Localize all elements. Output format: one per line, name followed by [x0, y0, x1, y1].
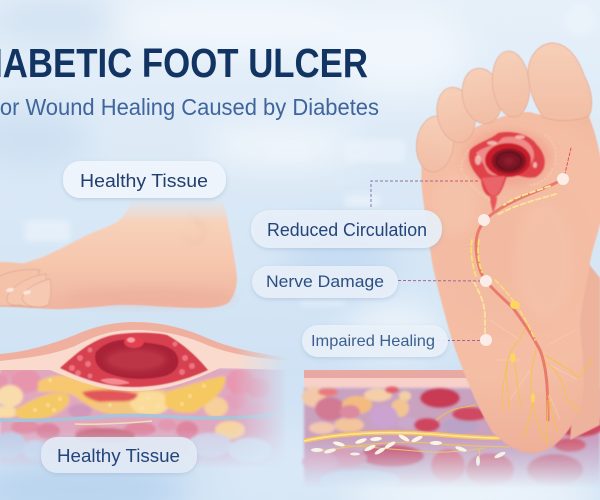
- pill: healthy tissue top: Healthy Tissue: [80, 171, 208, 191]
- pill: healthy tissue bottom: [41, 437, 197, 473]
- pill: reduced circulation: [251, 210, 442, 248]
- illustration: healthy foot side view: [0, 196, 237, 309]
- subcutaneous tissue: [0, 367, 285, 468]
- illustration: wound cross section: [0, 322, 290, 468]
- lower leg behind: [570, 258, 600, 440]
- skin layers: [0, 322, 290, 391]
- shading: [515, 200, 575, 320]
- toes: [0, 262, 51, 307]
- yellow nerve bundle: [304, 405, 510, 466]
- callout connector: nerve damage: [398, 280, 484, 282]
- pill: impaired healing: Impaired Healing: [311, 333, 435, 350]
- callout nodes: [478, 173, 569, 346]
- nerve pathway: [471, 148, 571, 420]
- callout connector: impaired healing: [437, 340, 484, 342]
- pill: nerve damage: [252, 266, 398, 298]
- pill: impaired healing: [302, 325, 448, 357]
- pill: reduced circulation: Reduced Circulation: [267, 220, 427, 240]
- pill: healthy tissue top: [63, 161, 226, 198]
- toes: [414, 49, 533, 174]
- fat speckle: [33, 378, 206, 412]
- illustration: nerve tissue cross section: [300, 370, 600, 486]
- callout connector: reduced circulation: [371, 181, 480, 207]
- sole: [421, 112, 600, 453]
- nerve branches: [502, 327, 592, 445]
- pill: nerve damage: Nerve Damage: [266, 272, 384, 291]
- illustration: plantar foot: [414, 43, 600, 453]
- ulcer crater: [60, 333, 208, 387]
- blue vessel: [0, 415, 276, 420]
- ulcer: [461, 130, 556, 213]
- big toe: [528, 43, 592, 121]
- pill: healthy tissue bottom: Healthy Tissue: [57, 446, 180, 466]
